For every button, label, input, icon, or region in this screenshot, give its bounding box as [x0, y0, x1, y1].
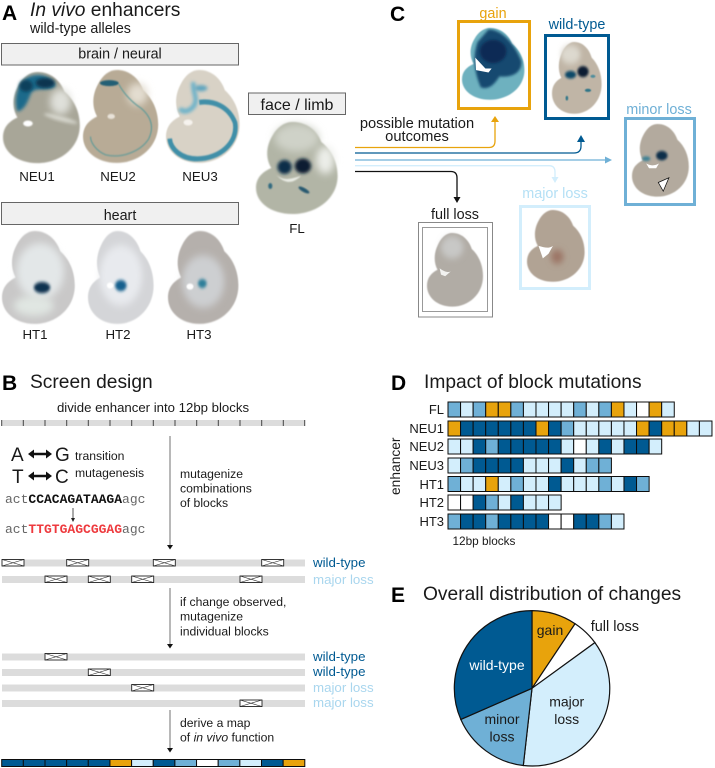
slice: full loss: [532, 624, 595, 688]
label: possible mutation outcomes: outcomes: [385, 129, 449, 145]
transition mutagenesis diagram: [11, 445, 144, 488]
arrow: combinations: [167, 436, 173, 550]
text: if change observed: individual blocks: [180, 624, 269, 638]
caption: 12bp blocks: 12bp blocks: [452, 534, 516, 548]
arrow: individual blocks: [167, 588, 173, 648]
panel: C mutation outcomes: [355, 3, 694, 317]
individual row 1: wild-type: [312, 649, 365, 664]
text: derive a map of in vivo function: in vivo function: [194, 730, 274, 744]
heading: In vivo enhancers: In vivo enhancers: [30, 0, 180, 21]
outcome: wild-type: wild-type: [548, 17, 605, 33]
enhancer bar with ticks: [2, 420, 305, 426]
label HT1: HT1: [22, 327, 48, 342]
embryo HT1: [2, 231, 75, 324]
individual row 3: major loss: [313, 680, 374, 695]
sequence: mutated: actTTGTGAGCGGAGagc: [5, 522, 145, 537]
combination row 2: major loss: [313, 572, 374, 587]
arrow to full loss: [355, 172, 460, 203]
row labels: HT1: [419, 477, 444, 492]
small arrow between sequences: [71, 508, 75, 522]
row labels: NEU3: [409, 458, 444, 473]
individual row 3: [2, 680, 374, 695]
individual row 2: wild-type: [312, 664, 365, 679]
row HT1: [448, 476, 649, 492]
pie labels: minor: [484, 711, 520, 727]
slice: gain: [532, 611, 575, 688]
embryo NEU3: [166, 70, 240, 163]
label NEU2: NEU2: [100, 169, 136, 184]
embryo NEU2: [83, 70, 158, 163]
row labels: FL: [429, 402, 444, 417]
header: face / limb: face / limb: [261, 97, 334, 114]
row HT2: [448, 495, 561, 510]
row NEU3: [448, 458, 611, 473]
outcome: full loss: [418, 207, 492, 317]
panel: D impact of block mutations: [388, 372, 712, 548]
header: heart: [2, 202, 238, 224]
embryo FL: [256, 122, 338, 214]
arrow to wild-type: [355, 135, 585, 153]
slice: wild-type: [454, 611, 532, 719]
slice: major loss: [523, 643, 610, 766]
row labels: NEU1: [409, 421, 444, 436]
arrow to major loss: [355, 166, 558, 183]
panel letter B: B: [2, 372, 17, 395]
row HT3: [448, 514, 624, 529]
row labels: NEU2: [409, 439, 444, 454]
pie labels: major: [549, 694, 584, 710]
row labels: [409, 402, 444, 529]
transition mutagenesis diagram: C: [55, 467, 69, 488]
label: possible mutation outcomes: possible mutation: [360, 116, 474, 132]
outcome: minor loss: [626, 102, 694, 204]
header: brain / neural: [2, 44, 238, 65]
text: derive a map of in vivo function: derive a map: [180, 716, 250, 730]
label NEU1: NEU1: [19, 169, 55, 184]
pie labels: [468, 619, 639, 744]
arrow to gain: [355, 116, 499, 148]
individual row 2: [2, 664, 365, 679]
y axis label: enhancer: enhancer: [388, 437, 403, 495]
text: if change observed: if change observed,: [180, 595, 286, 609]
panel letter A: A: [2, 2, 17, 25]
panel: E overall distribution: [391, 584, 681, 766]
function map bar: [2, 760, 305, 766]
embryo HT3: [168, 231, 238, 324]
embryo HT2: [88, 231, 154, 324]
pie labels: full loss: [591, 619, 639, 635]
transition mutagenesis diagram: A: [11, 445, 24, 466]
panel letter D: D: [391, 372, 406, 395]
row FL: [448, 402, 674, 417]
heading: Screen design: Screen design: [30, 372, 153, 393]
panel letter C: C: [390, 3, 405, 26]
label HT2: HT2: [105, 327, 131, 342]
text: mutagenize combinations of blocks: mutagenize: [180, 467, 243, 481]
label HT3: HT3: [186, 327, 212, 342]
individual row 1: [2, 649, 365, 664]
text: derive a map of in vivo function: of: [180, 730, 194, 744]
pie labels: wild-type: [468, 657, 525, 673]
outcome: major loss: major loss: [522, 186, 588, 202]
embryo NEU1: [3, 72, 80, 163]
row NEU2: [448, 439, 662, 454]
outcome: full loss: full loss: [431, 207, 479, 223]
heat grid: [448, 402, 712, 529]
row labels: HT3: [419, 514, 444, 529]
outcome: wild-type: [546, 17, 608, 118]
text: if change observed: mutagenize: [180, 610, 243, 624]
individual row 4: major loss: [313, 695, 374, 710]
header: heart: heart: [104, 208, 136, 224]
subheading: wild-type alleles: wild-type alleles: [29, 21, 131, 37]
header: face / limb: [248, 93, 346, 114]
outcome: major loss: [520, 186, 590, 288]
transition mutagenesis diagram: mutagenesis: [75, 466, 144, 480]
text: mutagenize combinations of blocks: combinations: [180, 482, 252, 496]
row NEU1: [448, 421, 712, 436]
sequence: wild-type: actCCACAGATAAGAagc: [5, 492, 145, 507]
arrow to minor loss: [355, 156, 612, 164]
outcome: gain: gain: [479, 6, 507, 22]
arrow: derive map: [167, 710, 173, 752]
heading: Impact of block mutations: Impact of block mutations: [424, 372, 642, 393]
transition mutagenesis diagram: G: [55, 445, 70, 466]
slice: minor loss: [461, 688, 532, 766]
transition mutagenesis diagram: T: [12, 467, 24, 488]
row labels: HT2: [419, 495, 444, 510]
header: brain / neural: brain / neural: [78, 46, 162, 62]
outcome: minor loss: minor loss: [626, 102, 692, 118]
panel: A in vivo enhancers: [2, 0, 346, 342]
pie labels: loss: [554, 711, 579, 727]
pie labels: gain: [537, 622, 563, 638]
individual row 4: [2, 695, 374, 710]
label NEU3: NEU3: [182, 169, 218, 184]
heading: Overall distribution of changes: Overall distribution of changes: [423, 584, 681, 605]
outcome: gain: [458, 6, 530, 108]
pie chart: [454, 611, 610, 766]
combination row 1: wild-type: [312, 555, 365, 570]
text: divide enhancer into 12bp blocks: divide enhancer into 12bp blocks: [57, 400, 249, 415]
pie labels: loss: [490, 728, 514, 744]
panel: B screen design: [2, 372, 374, 766]
text: mutagenize combinations of blocks: of blocks: [180, 496, 228, 510]
transition mutagenesis diagram: transition: [75, 449, 124, 463]
panel letter E: E: [391, 584, 405, 607]
combination row 2: [2, 572, 374, 587]
label FL: FL: [289, 221, 305, 236]
combination row 1: [2, 555, 365, 570]
